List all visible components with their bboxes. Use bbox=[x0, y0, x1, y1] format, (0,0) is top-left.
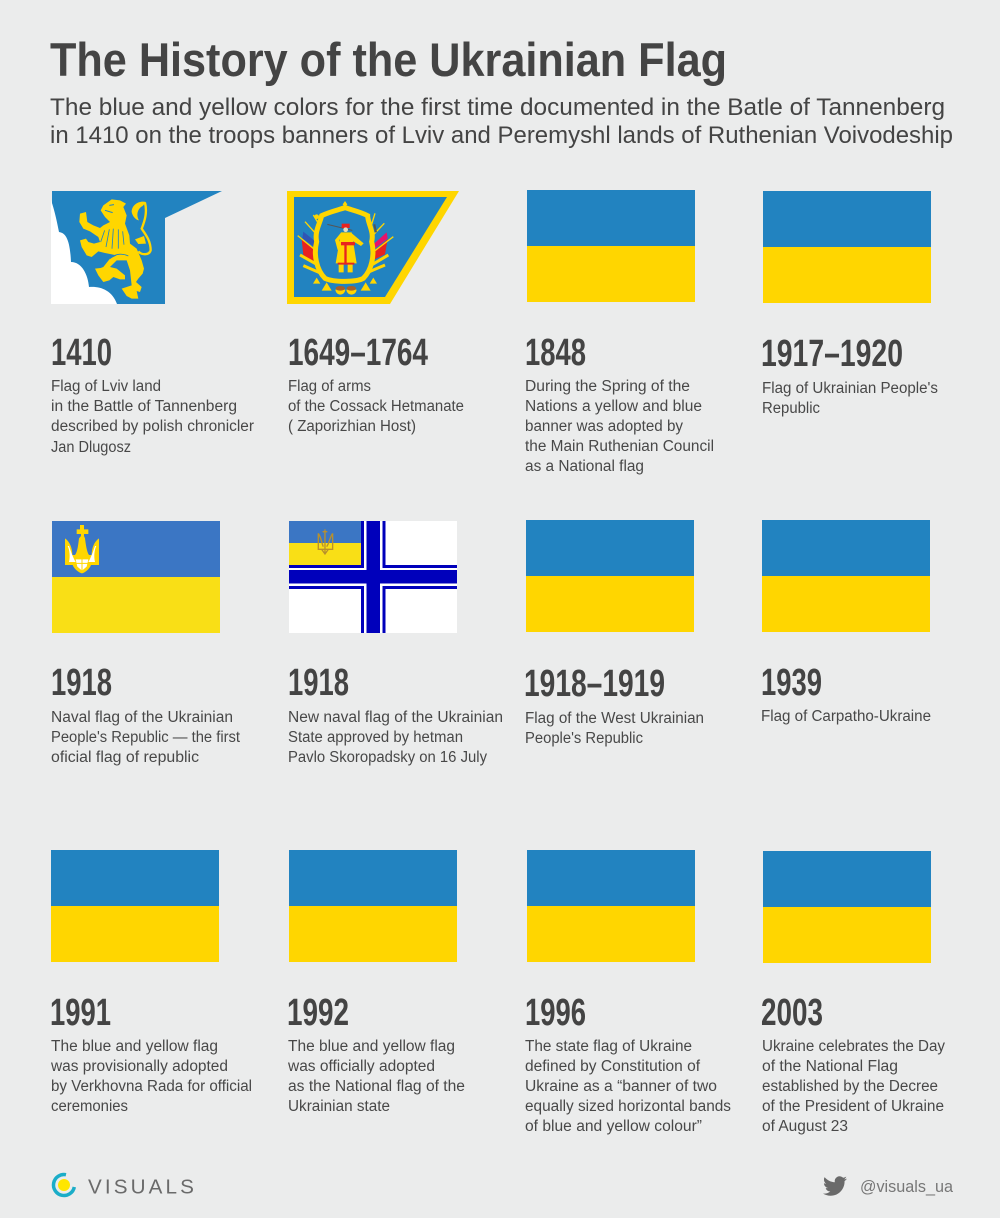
description: ceremonies bbox=[51, 1098, 128, 1115]
panel: 1918 new naval bbox=[288, 521, 503, 766]
description: the Main Ruthenian Council bbox=[525, 438, 714, 455]
description: of blue and yellow colour” bbox=[525, 1118, 702, 1135]
panel: 1939 bbox=[761, 520, 931, 725]
title: The History of the Ukrainian Flag bbox=[50, 33, 727, 86]
description: Ukraine celebrates the Day bbox=[762, 1038, 945, 1055]
logo: Visuals bbox=[53, 1175, 197, 1198]
description bbox=[525, 710, 704, 747]
description: State approved by hetman bbox=[288, 729, 463, 746]
flag bbox=[763, 851, 931, 963]
year: 2003 bbox=[761, 992, 823, 1034]
description: The blue and yellow flag bbox=[288, 1038, 455, 1055]
year: 1918 bbox=[288, 662, 349, 704]
description: of August 23 bbox=[762, 1118, 848, 1135]
description: The blue and yellow flag bbox=[51, 1038, 218, 1055]
description: Nations a yellow and blue bbox=[525, 398, 702, 415]
description: in the Battle of Tannenberg bbox=[51, 398, 237, 415]
description: as the National flag of the bbox=[288, 1078, 465, 1095]
description bbox=[525, 378, 714, 475]
description bbox=[762, 1038, 945, 1135]
year: 1917–1920 bbox=[761, 333, 903, 375]
description bbox=[51, 709, 241, 766]
description bbox=[50, 1038, 252, 1115]
twitter handle: @visuals_ua bbox=[860, 1177, 954, 1196]
panel: 1917-1920 bbox=[761, 191, 938, 417]
description: Ukrainian state bbox=[288, 1098, 390, 1115]
panel: 1848 bbox=[525, 190, 714, 475]
description: The state flag of Ukraine bbox=[525, 1038, 692, 1055]
description: oficial flag of republic bbox=[51, 749, 199, 766]
description bbox=[288, 709, 503, 766]
panel: 1649-1764 bbox=[287, 191, 464, 435]
year: 1991 bbox=[50, 992, 111, 1034]
panel: 1996 bbox=[525, 850, 731, 1135]
panel: 1410 bbox=[51, 191, 254, 456]
description: equally sized horizontal bands bbox=[525, 1098, 731, 1115]
year: 1918–1919 bbox=[524, 663, 665, 705]
flag bbox=[527, 850, 695, 962]
description: Pavlo Skoropadsky on 16 July bbox=[288, 749, 487, 766]
description: Flag of Lviv land bbox=[51, 378, 161, 395]
description: of the National Flag bbox=[762, 1058, 898, 1075]
panel: 1918-1919 bbox=[524, 520, 704, 747]
description bbox=[288, 378, 464, 435]
description: by Verkhovna Rada for official bbox=[51, 1078, 252, 1095]
description: Flag of the West Ukrainian bbox=[525, 710, 704, 727]
flag bbox=[526, 520, 694, 632]
icon: twitter bird bbox=[823, 1176, 847, 1196]
year: 1992 bbox=[287, 992, 349, 1034]
description: Flag of arms bbox=[288, 378, 371, 395]
flag bbox=[762, 520, 930, 632]
description: Naval flag of the Ukrainian bbox=[51, 709, 233, 726]
year: 1649–1764 bbox=[288, 332, 428, 374]
year: 1410 bbox=[51, 332, 112, 374]
flag bbox=[763, 191, 931, 303]
logo: Visuals: VISUALS bbox=[88, 1176, 197, 1198]
description: of the President of Ukraine bbox=[762, 1098, 944, 1115]
description: ( Zaporizhian Host) bbox=[288, 418, 416, 435]
panel: 1918 naval bbox=[51, 521, 241, 766]
description: Republic bbox=[762, 400, 820, 417]
description: People's Republic — the first bbox=[51, 729, 241, 746]
description: was provisionally adopted bbox=[50, 1058, 228, 1075]
year: 1918 bbox=[51, 662, 112, 704]
panel: 2003 bbox=[761, 851, 945, 1135]
year: 1996 bbox=[525, 992, 586, 1034]
subtitle: The blue and yellow colors for the first time documented in the Batle of Tannenberg bbox=[50, 94, 945, 121]
description: as a National flag bbox=[525, 458, 644, 475]
description: established by the Decree bbox=[762, 1078, 938, 1095]
description: banner was adopted by bbox=[525, 418, 683, 435]
description: During the Spring of the bbox=[525, 378, 690, 395]
description bbox=[287, 1038, 465, 1115]
description: defined by Constitution of bbox=[525, 1058, 701, 1075]
flag bbox=[289, 850, 457, 962]
description: was officially adopted bbox=[287, 1058, 435, 1075]
description bbox=[525, 1038, 731, 1135]
year: 1848 bbox=[525, 332, 586, 374]
panel: 1992 bbox=[287, 850, 465, 1115]
subtitle bbox=[50, 94, 953, 149]
description: described by polish chronicler bbox=[51, 418, 254, 435]
flag: Lviv land lion banner bbox=[51, 191, 222, 304]
description: of the Cossack Hetmanate bbox=[288, 398, 464, 415]
description bbox=[762, 380, 938, 417]
flag: naval flag with trident bbox=[52, 521, 220, 633]
flag bbox=[51, 850, 219, 962]
flag bbox=[527, 190, 695, 302]
subtitle: in 1410 on the troops banners of Lviv and Peremyshl lands of Ruthenian Voivodeship bbox=[50, 122, 953, 149]
flag: Cossack Hetmanate bbox=[287, 191, 459, 304]
description: Jan Dlugosz bbox=[51, 439, 131, 456]
description: Flag of Ukrainian People's bbox=[762, 380, 938, 397]
description: Ukraine as a “banner of two bbox=[525, 1078, 717, 1095]
flag: naval ensign with blue cross bbox=[289, 521, 457, 633]
description: New naval flag of the Ukrainian bbox=[288, 709, 503, 726]
year: 1939 bbox=[761, 662, 822, 704]
description: Flag of Carpatho-Ukraine bbox=[761, 708, 931, 725]
description: People's Republic bbox=[525, 730, 643, 747]
panel: 1991 bbox=[50, 850, 252, 1115]
description bbox=[51, 378, 254, 456]
